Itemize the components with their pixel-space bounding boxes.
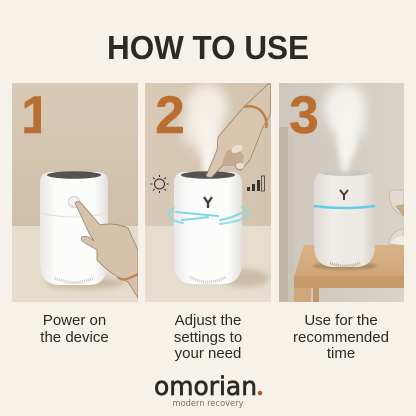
panel: step 2 [145,83,271,302]
caption: step 3: time [327,345,355,362]
caption: step 1: the device [40,329,109,346]
logo mark [340,190,348,200]
step number 1: 1 [21,86,51,145]
panel: step 1 [12,83,138,302]
hourglass [388,190,404,245]
humidifier: step 2 [174,171,269,287]
caption: step 1 [40,312,109,346]
humidifier: step 1 [40,171,125,289]
panel: step 3 [279,83,404,302]
caption: step 1: Power on [43,312,106,329]
caption: step 2: Adjust the [175,312,241,329]
tagline: modern recovery [172,399,244,409]
logo mark [204,197,212,208]
title: HOW TO USE [107,29,309,66]
mist: step 2 [181,84,228,180]
step number 3: 3 [289,86,319,145]
hand: step 2 [206,84,271,177]
humidifier: step 3 [313,170,377,270]
caption: step 3: recommended [293,329,389,346]
icon: signal level [247,176,264,191]
light ring [314,206,375,208]
mist: step 3 [324,84,366,173]
caption: step 2: settings to [174,329,242,346]
caption: step 2: your need [175,345,241,362]
icon: brightness [150,175,168,193]
brand logo: omorian [154,372,257,402]
table [294,245,404,302]
light rings: step 2 [169,207,248,224]
caption: step 3: Use for the [304,312,378,329]
caption: step 3 [293,312,389,362]
caption: step 2 [174,312,242,362]
hand: step 1 [75,202,138,298]
curtain / chair [279,127,288,302]
step number 2: 2 [155,86,185,145]
